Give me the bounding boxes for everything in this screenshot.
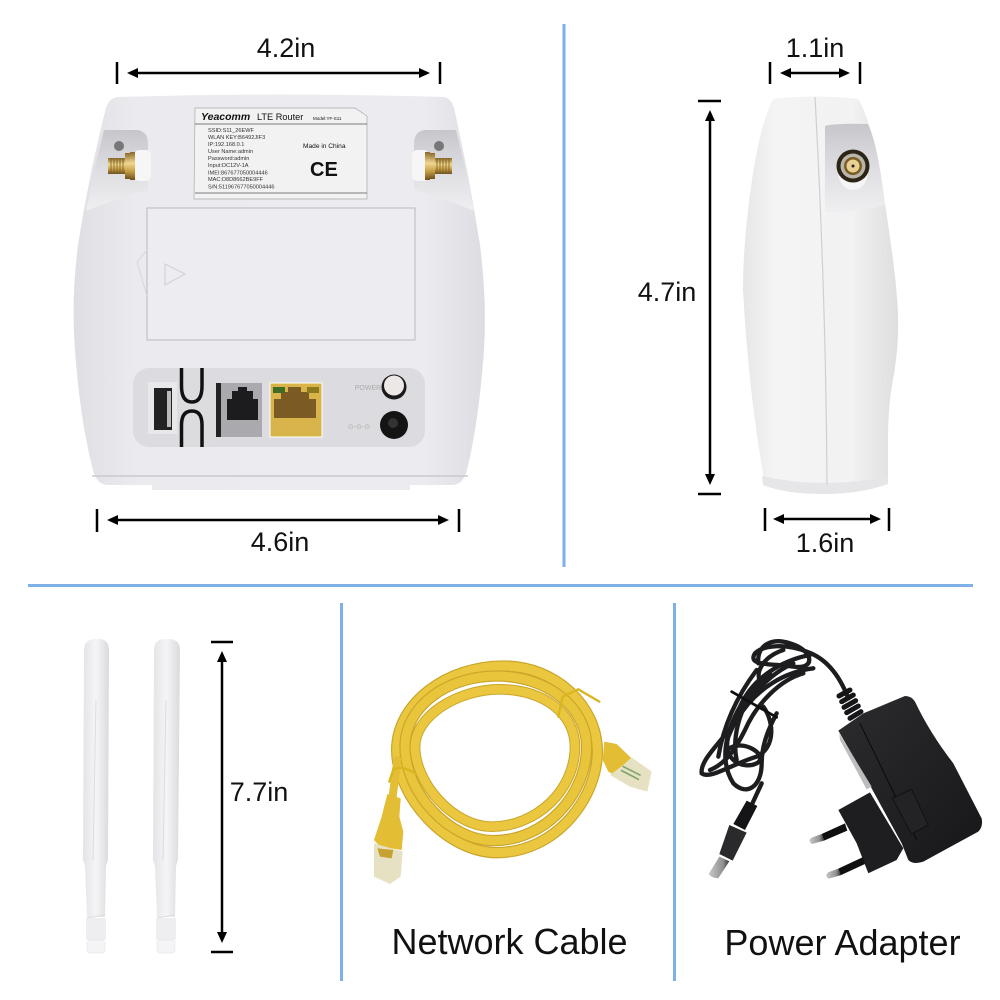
divider: bottom left vertical [340,603,343,981]
antenna connector [836,150,870,190]
power button: POWER [355,385,381,392]
cable coil [393,666,597,853]
bottom seam [92,475,468,477]
product label: Made in China [303,143,346,150]
TEL port [216,383,262,437]
slot cut-outs [182,368,202,447]
dimension: 4.6in: 4.6in [251,527,309,557]
right antenna [153,639,180,953]
left antenna recess [86,130,148,211]
right antenna recess [414,130,474,211]
base ring [762,476,888,494]
LAN port [270,383,322,437]
product label: SSID:S11_26EWF [208,128,254,134]
product label: Model:YF-S11 [313,116,342,121]
product label: CE [310,159,338,181]
left plug [374,794,403,884]
product label: Password:admin [208,156,249,162]
antenna recess [825,124,885,212]
product label: User Name:admin [208,149,253,155]
dimension: 1.1in: 1.1in [786,33,844,63]
dimension: 4.7in [638,101,721,494]
USB port [148,382,177,434]
DC jack: ⊙-⊙-⊙ [348,424,370,431]
router body [74,94,485,490]
dimension: 7.7in: 7.7in [230,777,288,807]
left connector [108,141,151,181]
product label: IMEI:867677050004446 [208,170,268,176]
product label: MAC:D8D8662BE9FF [208,177,264,183]
dimension: 4.7in: 4.7in [638,277,696,307]
dimension: 1.6in: 1.6in [796,528,854,558]
charger body [838,696,982,863]
side body [743,96,898,492]
product label: IP:192.168.0.1 [208,142,244,148]
right connector [412,141,452,181]
divider: top vertical [562,24,566,567]
seam [815,97,827,484]
dimension: 1.1in [770,33,860,84]
router rear view [74,94,485,490]
router side view [743,96,898,494]
dimension: 4.2in [117,33,440,84]
pins [810,823,865,879]
product label: S/N:511967677050004446 [208,184,274,190]
product label: WLAN KEY:B6492JIF3 [208,135,265,141]
DC jack [348,411,408,439]
product label [194,108,367,199]
barrel plug [709,801,757,878]
divider: horizontal [28,584,973,587]
port panel [133,368,425,447]
power button [355,374,406,400]
right plug [603,742,652,792]
label: power adapter: Power Adapter [724,922,961,963]
power adapter [702,641,982,879]
product label: LTE Router [257,112,303,122]
network cable [374,666,652,884]
cable ties [389,689,599,782]
dimension: 7.7in [211,642,288,952]
plug base [838,792,903,873]
dimension: 1.6in [765,508,889,558]
tangled cord [702,641,848,805]
left antenna [83,639,109,953]
dimension: 4.6in [97,509,459,557]
dimension: 4.2in: 4.2in [257,33,315,63]
product label: Input:DC12V-1A [208,163,249,169]
clip [892,789,928,834]
product label: Yeacomm [201,111,250,123]
battery cover [137,208,415,340]
strain relief [839,690,861,718]
label: network cable: Network Cable [391,921,628,962]
divider: bottom right vertical [673,603,676,981]
